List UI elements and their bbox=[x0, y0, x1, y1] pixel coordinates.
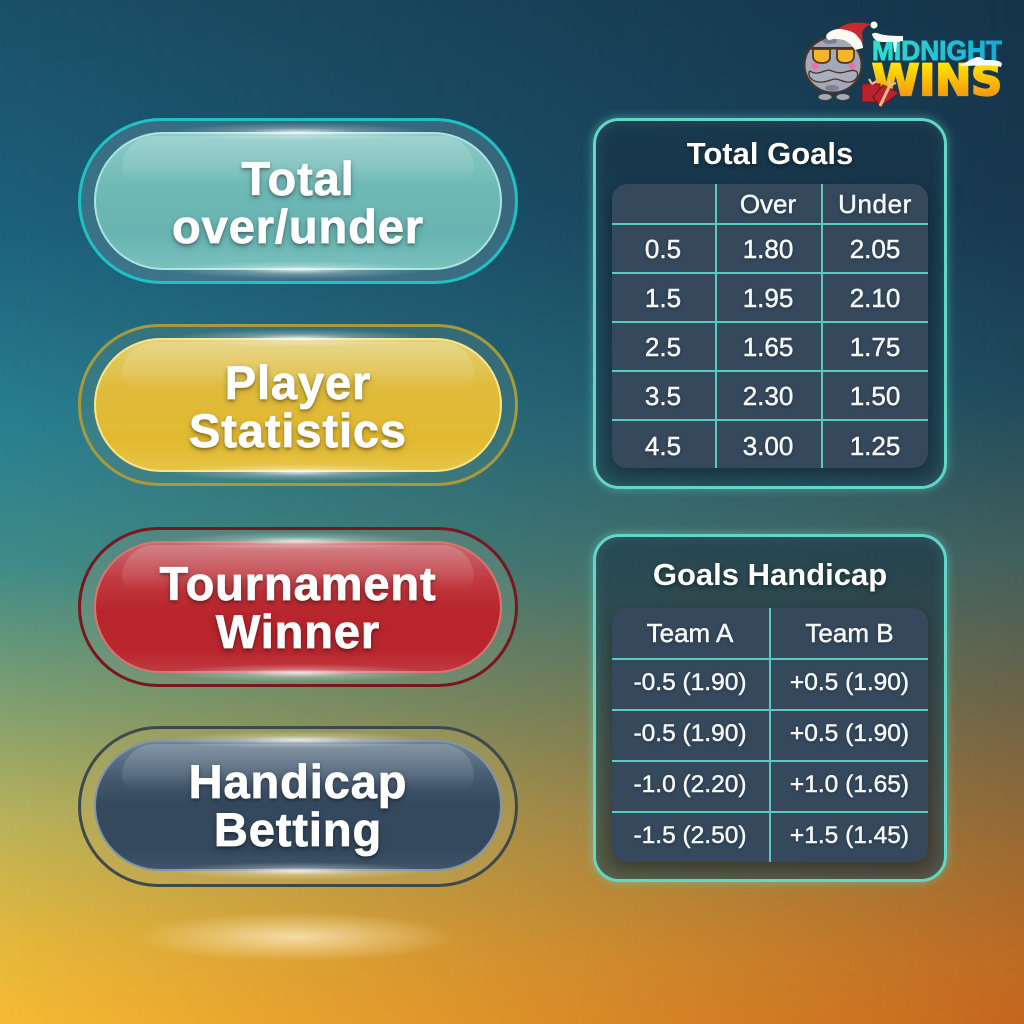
heading: Handicap Betting: Betting bbox=[214, 803, 382, 856]
panel: Total Goals card bbox=[593, 118, 947, 489]
panel: Handicap Betting button bbox=[78, 726, 518, 887]
table: Total Goals: 2.30 bbox=[743, 381, 793, 411]
heading: Tournament Winner: Winner bbox=[216, 605, 380, 658]
table: Goals Handicap: -1.5 (2.50) bbox=[633, 822, 747, 849]
table: Goals Handicap: -0.5 (1.90) bbox=[633, 720, 747, 747]
icon: gift boxes bbox=[862, 79, 899, 107]
heading: Player Statistics: Statistics bbox=[189, 404, 407, 457]
heading: Total over/under bbox=[170, 152, 425, 253]
heading: Tournament Winner: Tournament bbox=[159, 557, 437, 610]
table: Goals Handicap: +0.5 (1.90) bbox=[790, 669, 909, 696]
icon: moon mascot bbox=[804, 38, 862, 100]
panel: Total over/under button bbox=[78, 118, 518, 284]
table: Total Goals: 1.25 bbox=[850, 431, 900, 461]
bottom light glow bbox=[135, 912, 455, 962]
table: Goals Handicap: -0.5 (1.90) bbox=[633, 669, 747, 696]
text: WINS: WINS bbox=[872, 56, 1002, 106]
table: Total Goals bbox=[610, 184, 930, 474]
table: Total Goals: 2.05 bbox=[850, 234, 900, 264]
heading: Total Goals: Total Goals bbox=[687, 136, 853, 171]
table: Total Goals: 4.5 bbox=[645, 431, 681, 461]
table: Total Goals: 0.5 bbox=[645, 234, 681, 264]
table: Goals Handicap: Team B bbox=[805, 618, 894, 648]
table: Goals Handicap bbox=[610, 608, 930, 868]
table: Goals Handicap: +0.5 (1.90) bbox=[790, 720, 909, 747]
table: Total Goals: 1.65 bbox=[743, 332, 793, 362]
table: Total Goals: 2.5 bbox=[645, 332, 681, 362]
table: Total Goals: 1.95 bbox=[743, 283, 793, 313]
logo: Midnight Wins bbox=[804, 22, 1002, 108]
heading: Player Statistics: Player bbox=[225, 356, 371, 409]
panel: Player Statistics button bbox=[78, 324, 518, 486]
table: Goals Handicap: +1.5 (1.45) bbox=[790, 822, 909, 849]
table: Total Goals: Under bbox=[838, 189, 912, 219]
table: Total Goals: 1.50 bbox=[850, 381, 900, 411]
table: Total Goals: 1.5 bbox=[645, 283, 681, 313]
table: Total Goals: 3.5 bbox=[645, 381, 681, 411]
heading: Player Statistics bbox=[188, 356, 407, 457]
heading: Handicap Betting bbox=[189, 755, 407, 860]
table: Goals Handicap: Team A bbox=[647, 618, 733, 648]
panel: Tournament Winner button bbox=[78, 527, 518, 687]
table: Total Goals: 1.75 bbox=[850, 332, 900, 362]
heading: Tournament Winner bbox=[158, 557, 438, 658]
snow caps bbox=[872, 33, 1002, 67]
heading: Total over/under: over/under bbox=[172, 200, 424, 253]
icon: santa hat bbox=[826, 22, 878, 50]
heading: Total over/under: Total bbox=[241, 152, 355, 205]
table: Goals Handicap: -1.0 (2.20) bbox=[633, 771, 747, 798]
text: MIDNIGHT: MIDNIGHT bbox=[872, 35, 1002, 66]
heading: Goals Handicap: Goals Handicap bbox=[653, 557, 887, 592]
table: Total Goals: 3.00 bbox=[743, 431, 793, 461]
table: Total Goals: 1.80 bbox=[743, 234, 793, 264]
heading: Handicap Betting: Handicap bbox=[189, 755, 407, 808]
table: Goals Handicap: +1.0 (1.65) bbox=[790, 771, 909, 798]
table: Total Goals: Over bbox=[740, 189, 796, 219]
table: Total Goals: 2.10 bbox=[850, 283, 900, 313]
panel: Goals Handicap card bbox=[593, 534, 947, 882]
